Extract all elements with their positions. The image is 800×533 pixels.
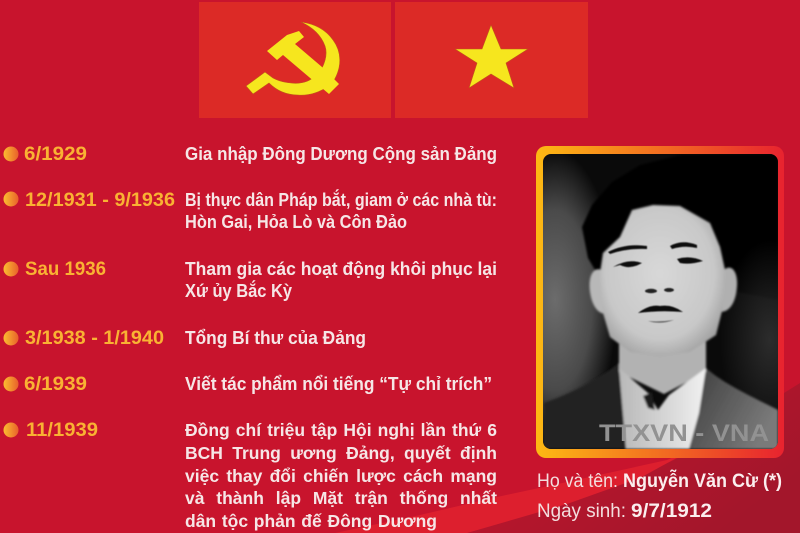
timeline row: 12/1931 - 9/1936: Bị thực dân Pháp bắt, giam ở các nhà tù: xyxy=(185,189,497,210)
brows xyxy=(608,245,647,254)
timeline row: Sau 1936: Sau 1936 xyxy=(25,259,106,280)
portrait frame xyxy=(536,146,784,458)
timeline row: 6/1929: 6/1929 xyxy=(24,144,87,165)
timeline row: 6/1939: 6/1939 xyxy=(24,374,87,395)
timeline row: 3/1938 - 1/1940: Tổng Bí thư của Đảng xyxy=(185,328,366,348)
background swoosh xyxy=(335,383,800,533)
timeline row: Sau 1936: Tham gia các hoạt động khôi phục lại xyxy=(185,259,497,279)
timeline row: 12/1931 - 9/1936 xyxy=(4,189,497,232)
nostrils xyxy=(645,289,657,293)
timeline row: 11/1939 description xyxy=(185,420,497,531)
timeline row: 11/1939 description: và thành lập Mặt trận thống nhất xyxy=(185,488,497,508)
timeline row: 6/1939: Viết tác phẩm nổi tiếng “Tự chỉ trích” xyxy=(185,374,492,394)
portrait photo xyxy=(543,154,778,449)
timeline row: 6/1929: Gia nhập Đông Dương Cộng sản Đảng xyxy=(185,144,497,164)
timeline row: 12/1931 - 9/1936: Hòn Gai, Hỏa Lò và Côn Đảo xyxy=(185,212,407,232)
right ear xyxy=(720,268,737,312)
hair xyxy=(582,154,778,300)
shirt xyxy=(619,368,706,449)
name line: Họ và tên: xyxy=(537,471,618,492)
timeline row: 3/1938 - 1/1940 xyxy=(4,328,366,349)
face xyxy=(600,205,725,357)
flag: party hammer and sickle xyxy=(199,2,391,118)
timeline row: 11/1939 description: việc thay đổi chiến lược cách mạng xyxy=(185,466,497,486)
timeline row: 11/1939 description: dân tộc phản đế Đông Dương xyxy=(185,511,437,531)
timeline row: 12/1931 - 9/1936: 12/1931 - 9/1936 xyxy=(25,190,175,211)
timeline row: 3/1938 - 1/1940: 3/1938 - 1/1940 xyxy=(25,328,164,349)
timeline row: 6/1939 xyxy=(4,374,492,395)
jacket left xyxy=(543,362,627,449)
flag: national star xyxy=(395,2,588,118)
jacket right xyxy=(688,368,778,449)
timeline row: Sau 1936: Xứ ủy Bắc Kỳ xyxy=(185,280,292,301)
timeline row: 11/1939 description: Đồng chí triệu tập Hội nghị lần thứ 6 xyxy=(185,420,497,440)
name line: Nguyễn Văn Cừ (*) xyxy=(623,470,782,492)
birth date line xyxy=(537,501,712,522)
neck xyxy=(619,335,706,394)
birth date line: Ngày sinh: xyxy=(537,501,626,522)
birth date line: 9/7/1912 xyxy=(631,501,712,522)
icon: yellow star xyxy=(455,25,528,88)
timeline row: 11/1939 description: BCH Trung ương Đảng, quyết định xyxy=(185,443,497,463)
timeline row: 11/1939 marker and date: 11/1939 xyxy=(26,420,98,441)
left ear xyxy=(590,269,606,314)
icon: hammer and sickle xyxy=(246,22,340,95)
watermark: TTXVN - VNA xyxy=(599,420,769,447)
eyes xyxy=(613,261,642,267)
timeline row: Sau 1936 xyxy=(4,259,497,301)
name line xyxy=(537,470,782,492)
timeline row: 6/1929 xyxy=(4,144,497,165)
mouth xyxy=(638,306,683,313)
